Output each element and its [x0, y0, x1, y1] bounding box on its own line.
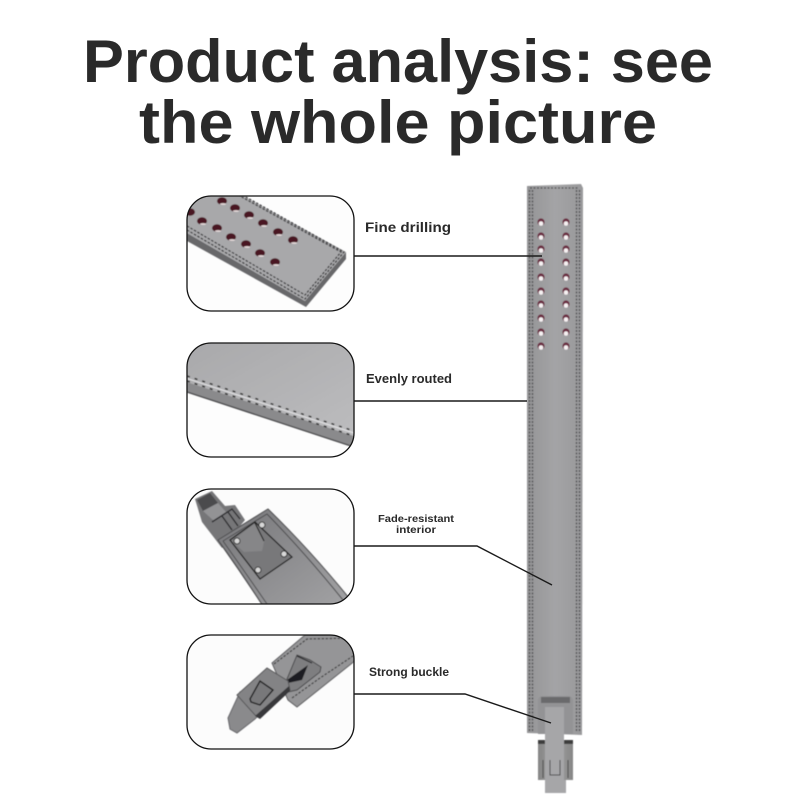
label: fade-resistant interior	[378, 513, 455, 536]
rivets	[234, 522, 287, 573]
latch window	[250, 681, 273, 705]
panel: evenly routed close-up	[187, 343, 354, 457]
title: the whole picture	[139, 89, 657, 156]
leader line: evenly routed	[354, 400, 527, 402]
belt end	[272, 635, 356, 707]
label: fade-resistant interior: interior	[396, 524, 436, 536]
buckle	[538, 696, 573, 793]
label: fade-resistant interior: Fade-resistant	[378, 513, 455, 525]
hole columns	[537, 218, 570, 350]
latch body	[237, 668, 290, 718]
label: strong buckle: Strong buckle	[369, 665, 449, 679]
title	[83, 28, 713, 156]
title: Product analysis: see	[83, 28, 713, 95]
main belt	[527, 184, 583, 793]
drilled holes	[185, 197, 298, 266]
panel: fade-resistant interior close-up	[187, 489, 354, 606]
leader line: strong buckle	[354, 694, 551, 723]
label: evenly routed: Evenly routed	[366, 372, 452, 386]
panel: fine drilling close-up	[185, 196, 354, 311]
leader line: fine drilling	[354, 255, 542, 257]
leader line: fade-resistant interior	[354, 546, 552, 585]
stitching	[530, 188, 580, 731]
latch upper	[287, 655, 321, 692]
label: fine drilling: Fine drilling	[365, 219, 451, 235]
metal plate	[230, 522, 292, 579]
belt back	[218, 509, 349, 606]
buckle bracket	[195, 491, 245, 548]
latch tongue	[228, 692, 262, 733]
panel: strong buckle close-up	[187, 635, 356, 749]
belt strap	[527, 184, 583, 735]
